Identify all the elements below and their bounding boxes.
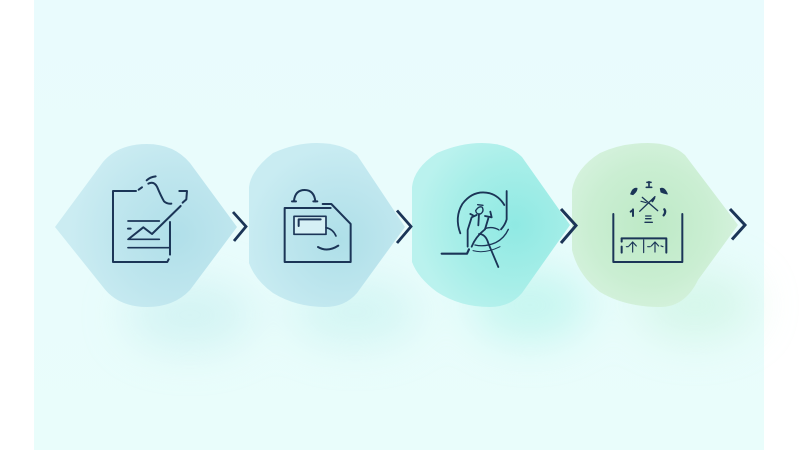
arrow: chevron 1	[233, 212, 246, 241]
icon: figure inside circle	[442, 191, 508, 267]
panel: step 3 shape	[412, 143, 570, 307]
soft shadows under shapes	[125, 269, 755, 349]
panel: step 2 shape	[249, 143, 405, 307]
icon: document with rising chart	[113, 176, 187, 262]
panel: step 1 hexagon	[55, 144, 237, 307]
arrow: chevron 4	[730, 209, 745, 240]
icon: folder with window and handle	[285, 190, 351, 262]
arrow: chevron 3	[561, 209, 576, 243]
arrow: chevron 2	[397, 210, 411, 243]
icon: container with crossed tools	[613, 182, 682, 262]
panel: step 4 shape	[572, 143, 738, 307]
